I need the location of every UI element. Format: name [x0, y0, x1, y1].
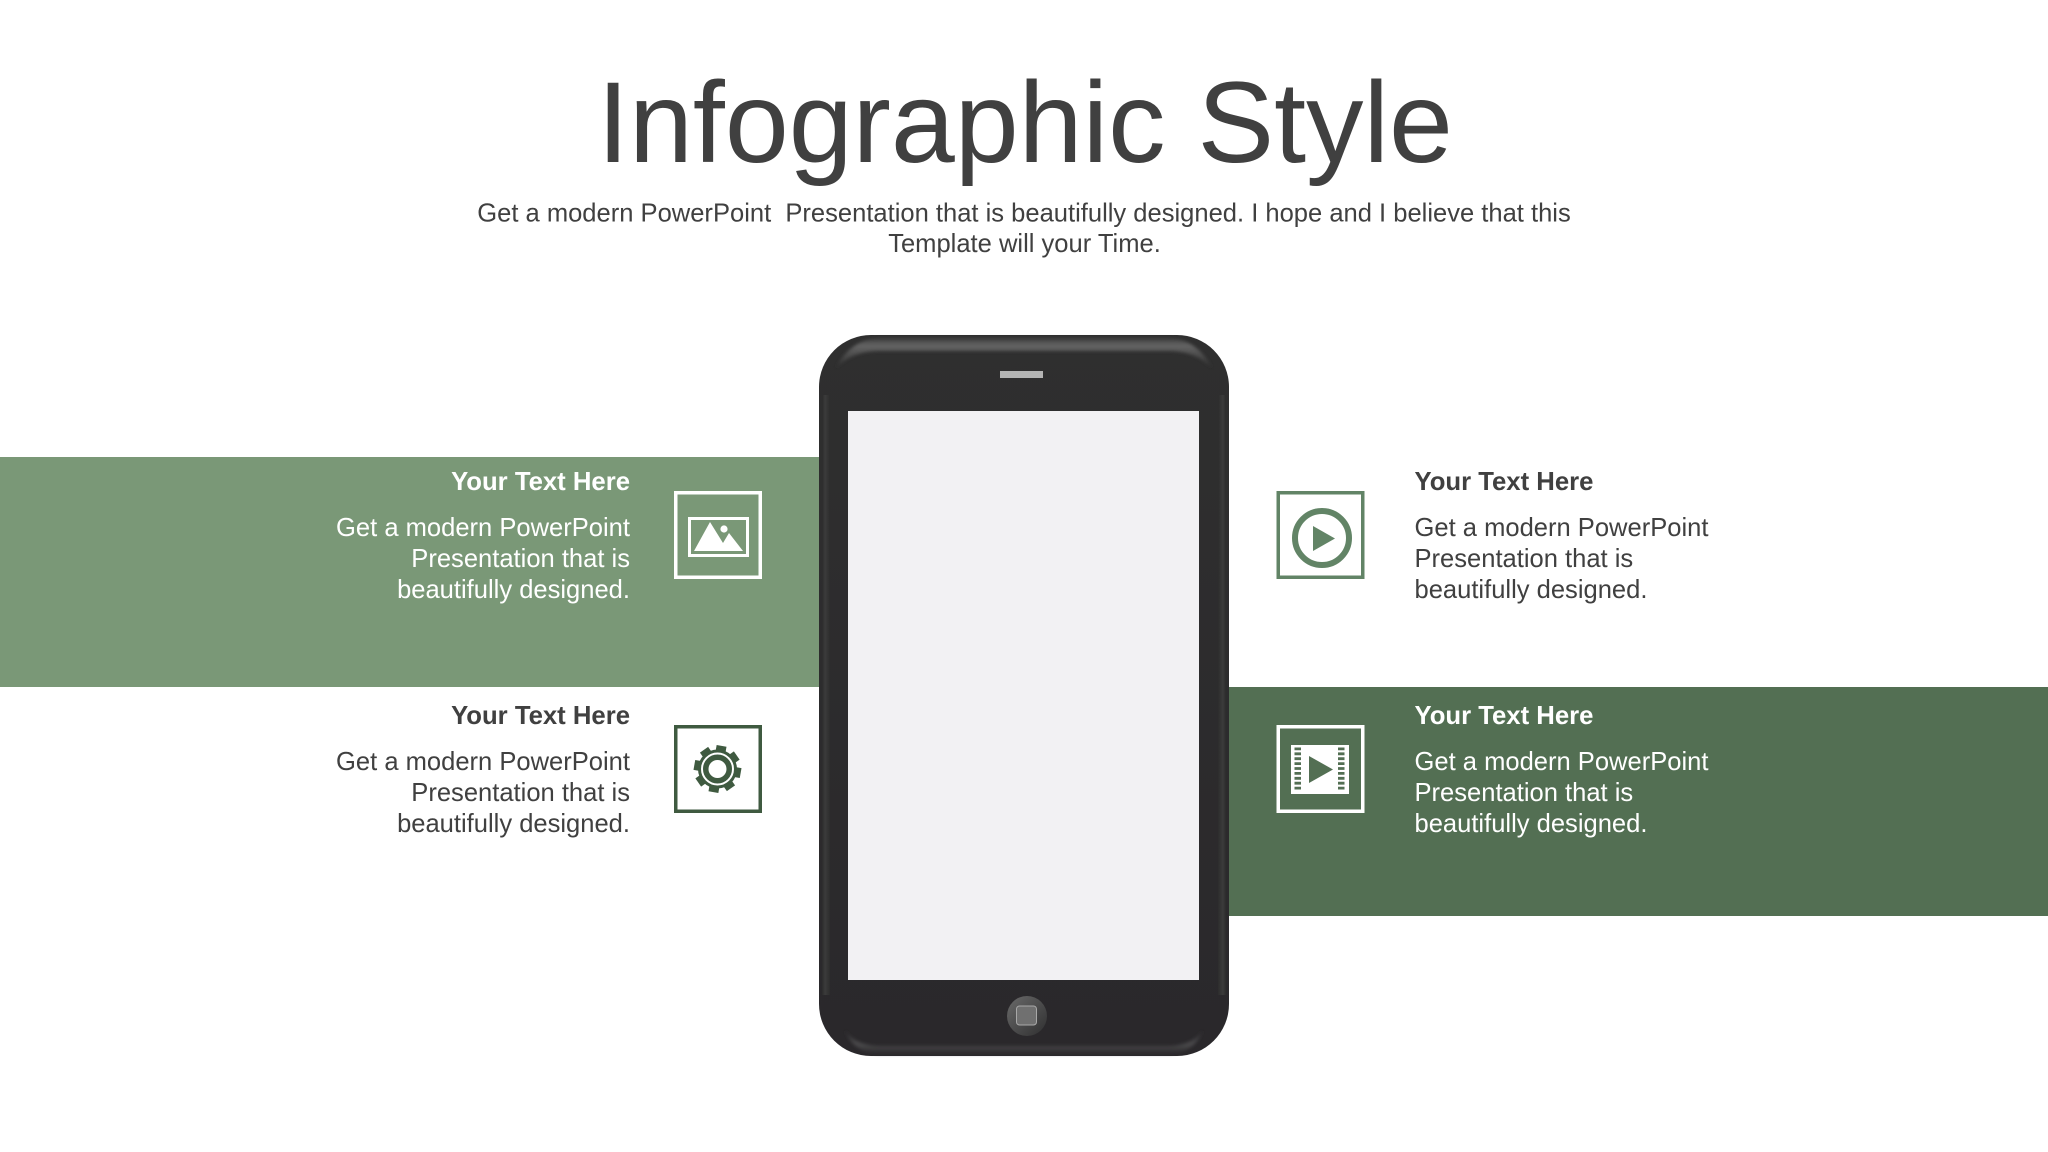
block: top right text: Presentation that is — [1414, 545, 1633, 573]
block: top left text — [336, 468, 630, 604]
block: bottom left text: Presentation that is — [411, 779, 630, 807]
icon: gear — [676, 727, 760, 811]
block: top right text: Your Text Here — [1414, 468, 1593, 496]
phone speaker — [1000, 371, 1043, 378]
block: top left text: Presentation that is — [411, 545, 630, 573]
phone body — [819, 335, 1229, 1056]
icon: film strip — [1278, 727, 1363, 811]
block: bottom right text: beautifully designed. — [1414, 810, 1647, 838]
block: bottom right text: Get a modern PowerPoint — [1414, 748, 1708, 776]
block: bottom left text — [336, 702, 630, 838]
icon: picture — [676, 493, 760, 577]
subtitle: Get a modern PowerPoint Presentation that is beautifully designed. I hope and I believe that this — [477, 200, 1571, 228]
block: top left text: beautifully designed. — [397, 576, 630, 604]
block: bottom left text: beautifully designed. — [397, 810, 630, 838]
phone top bevel — [836, 338, 1212, 368]
phone home button — [1007, 996, 1047, 1036]
block: bottom right text: Presentation that is — [1414, 779, 1633, 807]
icon: play circle — [1278, 493, 1363, 577]
block: top right text: beautifully designed. — [1414, 576, 1647, 604]
subtitle: Template will your Time. — [888, 230, 1161, 258]
block: top left text: Your Text Here — [451, 468, 630, 496]
block: bottom right text: Your Text Here — [1414, 702, 1593, 730]
block: top left text: Get a modern PowerPoint — [336, 514, 630, 542]
title: Infographic Style — [597, 59, 1453, 187]
phone left bevel — [823, 395, 828, 995]
block: top right text — [1414, 468, 1708, 604]
phone right bevel — [1220, 395, 1225, 995]
phone — [819, 335, 1229, 1056]
block: bottom left text: Get a modern PowerPoint — [336, 748, 630, 776]
block: top right text: Get a modern PowerPoint — [1414, 514, 1708, 542]
phone bottom bevel — [845, 1030, 1203, 1054]
block: bottom left text: Your Text Here — [451, 702, 630, 730]
phone screen — [848, 411, 1199, 980]
band: left green — [0, 457, 820, 687]
subtitle — [477, 200, 1571, 258]
band: right dark green — [1228, 687, 2048, 916]
block: bottom right text — [1414, 702, 1708, 838]
